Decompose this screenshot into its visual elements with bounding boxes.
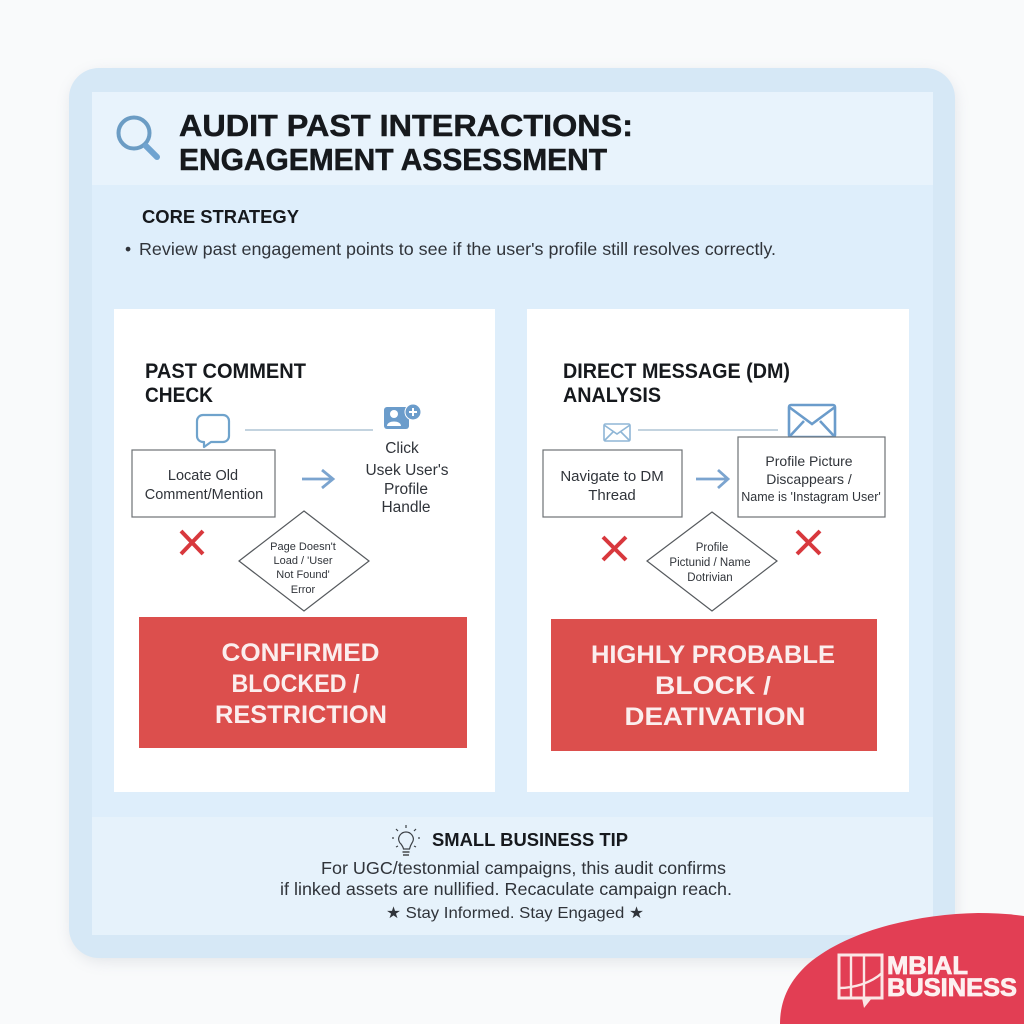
decision diamond: Error bbox=[291, 584, 316, 596]
tip band bbox=[92, 817, 933, 935]
step box: profile picture disappears: Profile Picture bbox=[765, 453, 853, 469]
step box: profile picture disappears bbox=[738, 437, 885, 517]
result banner bbox=[551, 619, 877, 751]
text: click user's profile handle: Usek User's bbox=[365, 462, 449, 479]
icon: red x right bbox=[797, 531, 820, 554]
step box: locate old comment: Comment/Mention bbox=[145, 487, 263, 503]
arrow bbox=[696, 470, 728, 488]
step box: navigate to dm thread: Thread bbox=[588, 487, 636, 504]
result banner bbox=[139, 617, 467, 748]
panel heading: PAST COMMENT bbox=[145, 359, 306, 383]
panel heading bbox=[563, 359, 790, 407]
panel: direct message analysis bbox=[527, 309, 909, 792]
brand name: BUSINESS bbox=[887, 974, 1017, 1002]
decision diamond: Load / 'User bbox=[274, 555, 333, 567]
text: click user's profile handle: Profile bbox=[384, 481, 428, 498]
icon: add user bbox=[384, 404, 421, 429]
icon: red x bbox=[181, 531, 203, 554]
header band bbox=[92, 92, 933, 185]
panel heading: DIRECT MESSAGE (DM) bbox=[563, 359, 790, 383]
infographic card bbox=[69, 68, 956, 962]
panel heading: ANALYSIS bbox=[563, 383, 661, 407]
title: AUDIT PAST INTERACTIONS: bbox=[179, 108, 633, 143]
decision diamond: Dotrivian bbox=[687, 572, 733, 584]
result banner: HIGHLY PROBABLE bbox=[591, 641, 835, 669]
decision diamond: Pictunid / Name bbox=[669, 557, 751, 569]
result banner: CONFIRMED bbox=[222, 639, 380, 667]
connector line bbox=[638, 429, 778, 431]
brand name bbox=[887, 952, 1017, 1002]
result banner: RESTRICTION bbox=[215, 701, 387, 729]
core strategy bullet: Review past engagement points to see if the user's profile still resolves correctly. bbox=[139, 239, 776, 259]
result banner: BLOCK / bbox=[655, 672, 771, 700]
icon: small envelope bbox=[604, 424, 630, 441]
tip body bbox=[280, 858, 732, 899]
tagline: ★ Stay Informed. Stay Engaged ★ bbox=[386, 905, 644, 922]
panel heading bbox=[145, 359, 306, 407]
panel: past comment check bbox=[114, 309, 495, 792]
core strategy heading: CORE STRATEGY bbox=[142, 206, 300, 227]
icon: speech bubble bbox=[197, 415, 229, 447]
step box: profile picture disappears: Name is 'Instagram User' bbox=[741, 490, 881, 504]
decision diamond bbox=[647, 512, 777, 611]
connector line bbox=[245, 429, 373, 431]
result banner: DEATIVATION bbox=[624, 703, 806, 731]
tip heading: SMALL BUSINESS TIP bbox=[432, 829, 628, 850]
decision diamond bbox=[239, 511, 369, 611]
step box: navigate to dm thread: Navigate to DM bbox=[560, 468, 664, 485]
icon: light bulb bbox=[392, 825, 420, 855]
title bbox=[179, 108, 633, 177]
step box: locate old comment: Locate Old bbox=[168, 468, 238, 484]
tip body: For UGC/testonmial campaigns, this audit confirms bbox=[321, 858, 726, 878]
text: click user's profile handle bbox=[365, 440, 449, 516]
decision diamond: Profile bbox=[696, 542, 728, 554]
icon: brand logo bbox=[839, 955, 882, 1008]
text: click user's profile handle: Click bbox=[385, 440, 419, 457]
text: click user's profile handle: Handle bbox=[381, 499, 431, 516]
brand name: MBIAL bbox=[887, 952, 968, 980]
decision diamond: Not Found' bbox=[276, 569, 330, 581]
panel heading: CHECK bbox=[145, 383, 213, 407]
arrow bbox=[302, 470, 333, 488]
small business tip bbox=[280, 825, 732, 922]
result banner: BLOCKED / bbox=[232, 670, 360, 698]
decision diamond: Page Doesn't bbox=[270, 541, 336, 553]
title: ENGAGEMENT ASSESSMENT bbox=[179, 142, 607, 177]
step box: locate old comment bbox=[132, 450, 275, 517]
brand badge bbox=[780, 913, 1024, 1024]
icon: large envelope bbox=[789, 405, 835, 437]
step box: navigate to dm thread bbox=[543, 450, 682, 517]
icon: magnifying glass bbox=[118, 118, 157, 157]
step box: profile picture disappears: Discappears / bbox=[766, 471, 852, 487]
icon: red x left bbox=[603, 537, 626, 560]
core strategy bullet: • bbox=[125, 239, 131, 259]
tip body: if linked assets are nullified. Recaculate campaign reach. bbox=[280, 879, 732, 899]
